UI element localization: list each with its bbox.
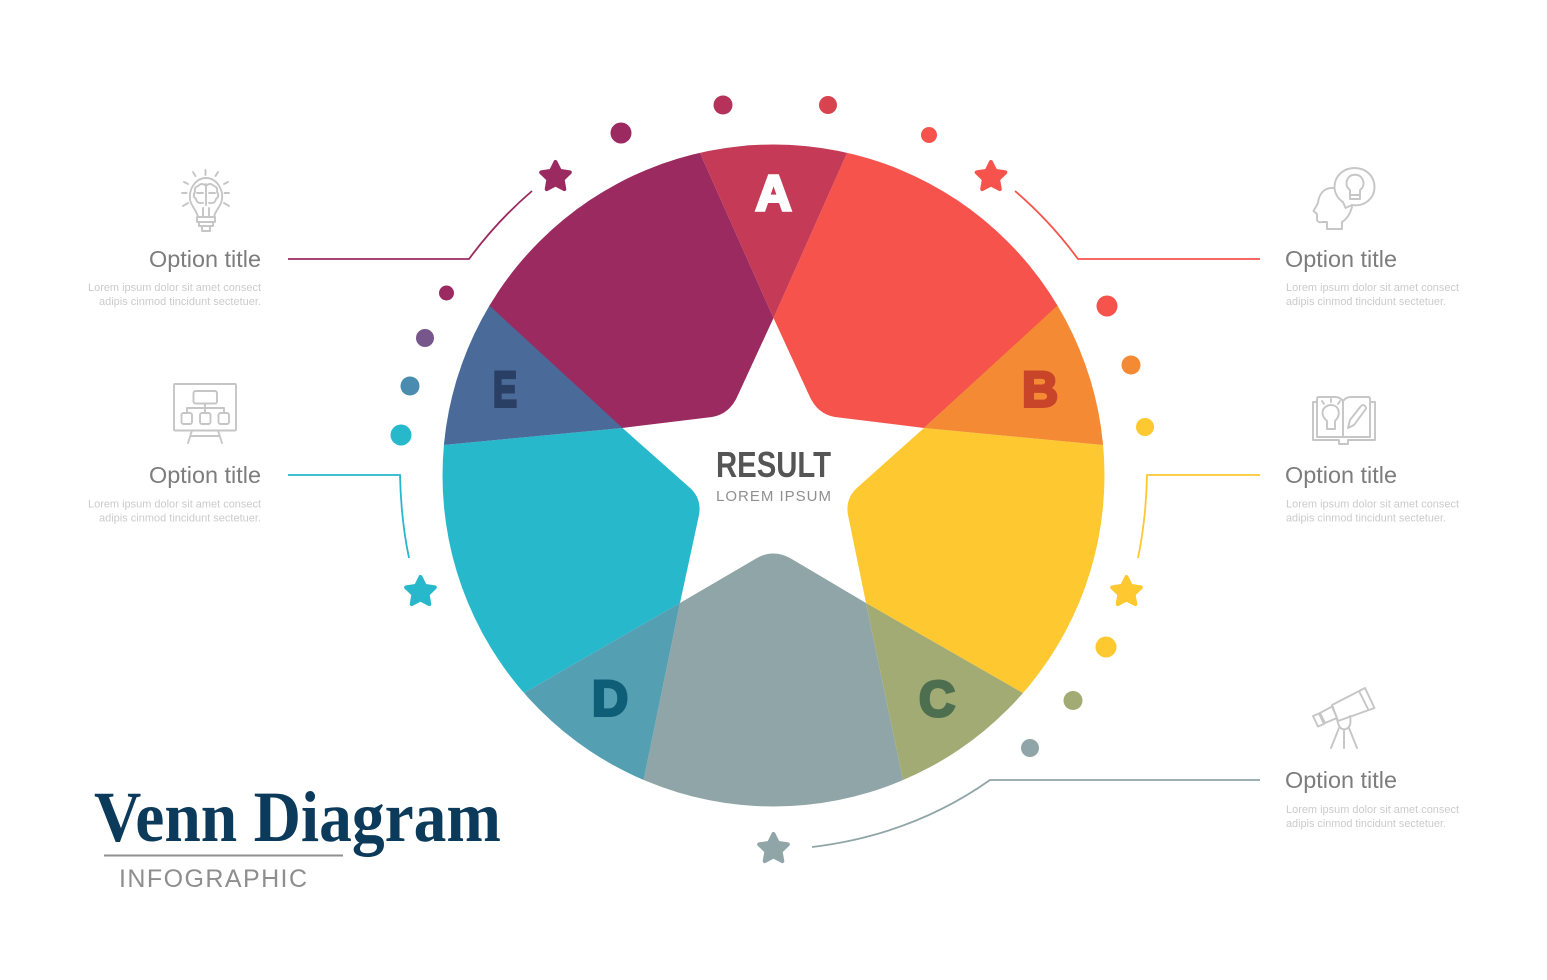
- icon: flowchart board: [174, 384, 236, 443]
- connector: teal: [288, 475, 409, 558]
- subtitle: INFOGRAPHIC: [119, 865, 307, 893]
- overlap: E: [444, 306, 622, 445]
- option description: adipis cinmod tincidunt sectetuer.: [99, 296, 261, 308]
- icon: brain light bulb: [182, 170, 229, 231]
- option description: [1286, 498, 1459, 524]
- overlap: D: [524, 603, 680, 780]
- star: gray: [759, 834, 788, 861]
- segment: purple: [489, 152, 774, 428]
- overlap: C: [866, 603, 1023, 780]
- option title: Option title: [1285, 767, 1397, 793]
- option title: Option title: [149, 462, 261, 488]
- connector: purple: [288, 191, 532, 259]
- option: top right: [1285, 168, 1459, 308]
- segment: teal: [442, 428, 700, 693]
- center result label: [716, 444, 831, 505]
- connector: gray: [812, 780, 1260, 847]
- letter A: A: [755, 166, 792, 222]
- star: yellow: [1112, 577, 1141, 604]
- option description: adipis cinmod tincidunt sectetuer.: [1286, 818, 1446, 830]
- result heading: RESULT: [716, 444, 831, 485]
- option description: Lorem ipsum dolor sit amet consect: [88, 498, 261, 510]
- option description: adipis cinmod tincidunt sectetuer.: [1286, 512, 1446, 524]
- star: red: [977, 162, 1005, 189]
- star: teal: [406, 577, 435, 604]
- dots: arc B: [1096, 296, 1154, 436]
- overlap: A: [700, 144, 847, 318]
- overlap: B: [924, 306, 1104, 445]
- connector: red: [1015, 191, 1260, 259]
- option: middle right: [1285, 397, 1459, 524]
- dots: arc E: [390, 286, 454, 446]
- option description: Lorem ipsum dolor sit amet consect: [88, 282, 261, 294]
- letter D: D: [592, 670, 628, 726]
- venn diagram circle: [442, 144, 1104, 806]
- letter C: C: [919, 671, 955, 727]
- option description: adipis cinmod tincidunt sectetuer.: [99, 512, 261, 524]
- option description: Lorem ipsum dolor sit amet consect: [1286, 804, 1459, 816]
- option description: [88, 498, 261, 524]
- icon: open book: [1313, 397, 1375, 444]
- icon: head with idea bubble: [1314, 168, 1374, 229]
- option: middle left: [88, 384, 261, 524]
- title rule: [104, 854, 343, 856]
- title block: [94, 777, 501, 893]
- option description: [1286, 804, 1459, 830]
- option description: Lorem ipsum dolor sit amet consect: [1286, 282, 1459, 294]
- segment: gray: [644, 554, 903, 806]
- option description: [1286, 282, 1459, 308]
- dots: arc C: [1021, 636, 1116, 757]
- segment: yellow: [847, 428, 1104, 693]
- option: bottom right: [1285, 688, 1459, 830]
- option title: Option title: [1285, 462, 1397, 488]
- title: Venn Diagram: [94, 777, 501, 857]
- option title: Option title: [1285, 246, 1397, 272]
- letter E: E: [493, 362, 517, 418]
- star: purple: [541, 162, 570, 189]
- segment: red: [774, 152, 1058, 428]
- letter B: B: [1022, 362, 1058, 418]
- option description: [88, 282, 261, 308]
- option description: adipis cinmod tincidunt sectetuer.: [1286, 296, 1446, 308]
- option title: Option title: [149, 246, 261, 272]
- dots: arc A: [610, 96, 937, 144]
- option description: Lorem ipsum dolor sit amet consect: [1286, 498, 1459, 510]
- result subtext: LOREM IPSUM: [716, 488, 831, 505]
- connector: yellow: [1138, 475, 1260, 558]
- icon: telescope: [1313, 688, 1374, 748]
- option: top left: [88, 170, 261, 308]
